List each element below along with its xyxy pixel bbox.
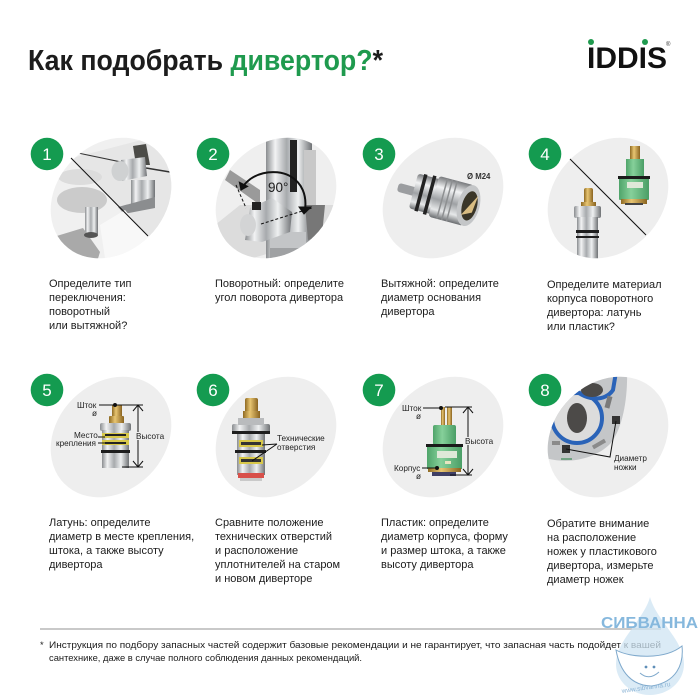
text: уплотнителей на старом [215,559,340,571]
text: Пластик: определите [381,517,489,529]
text: и размер штока, а также [381,545,506,557]
callout lines [252,444,277,461]
text: дивертора [381,306,435,318]
badge 5: 5 [42,381,52,400]
labels: Шток [77,401,97,410]
labels: крепления [56,439,96,448]
text: Определите материал [547,279,662,291]
labels: Место [74,431,98,440]
label: tech holes: отверстия [277,443,315,452]
image: switch types [50,138,172,258]
watermark: Sibvanna [601,597,698,695]
text: диаметр в месте крепления, [49,531,194,543]
footnote: * [40,639,44,650]
badge 8 [529,374,561,406]
text: Поворотный: определите [215,278,344,290]
label: M24: Ø M24 [467,172,491,181]
title: Как подобрать дивертор?* [28,45,384,77]
foot markers [561,416,620,459]
image: plastic disc with feet [548,376,627,461]
badge 1: 1 [42,145,52,164]
text: технических отверстий [215,531,332,543]
image: brass cartridge [100,405,131,468]
badge 3 [363,138,395,170]
text: Сравните положение [215,517,324,529]
panel: step 2 [197,130,345,304]
text: дивертора: латунь [547,307,642,319]
panel: step 3 [358,113,528,318]
badge 6: 6 [208,381,218,400]
badge 7: 7 [374,381,384,400]
callouts: stem, body, height [422,406,473,475]
text: на расположение [547,532,636,544]
background blob [26,352,196,522]
text: Вытяжной: определите [381,278,499,290]
callouts: stem, mount, height [98,404,143,467]
text: поворотный [49,306,110,318]
labels: Высота [465,437,494,446]
watermark: Sibvanna: www.sibvanna.ru [620,681,671,695]
panel: step 8 [528,374,668,586]
labels: Шток [402,404,422,413]
badge 1 [31,138,63,170]
panel: step 5 [26,352,196,571]
background blob [523,113,693,283]
rotation arc arrow [236,172,312,224]
badge 4 [529,138,561,170]
image: pull diverter [393,166,485,229]
badge 2: 2 [208,145,218,164]
background blob [358,352,528,522]
badge 3: 3 [374,145,384,164]
divider line [71,158,148,236]
text: Определите тип [49,278,132,290]
text: Обратите внимание [547,518,649,530]
label: foot diameter: ножки [614,463,637,472]
labels: Корпус [394,464,420,473]
label: tech holes: Технические [277,434,325,443]
text: высоту дивертора [381,559,474,571]
text: или вытяжной? [49,320,127,332]
callout lines [566,421,616,457]
image: brass cartridge with holes [232,398,270,481]
badge 7 [363,374,395,406]
labels: ø [416,472,421,481]
text: угол поворота дивертора [215,292,344,304]
labels: ø [92,409,97,418]
footnote: сантехнике, даже в случае полного соблюдения данных рекомендаций. [49,652,362,663]
background blob [191,352,361,522]
text: дивертора [49,559,103,571]
footnote rule [40,628,661,630]
panel: step 7 [358,352,528,571]
text: диаметр ножек [547,574,624,586]
label: foot diameter: Диаметр [614,454,647,463]
text: и новом диверторе [215,573,312,585]
labels [56,401,165,448]
image: brass cartridge [574,188,601,259]
image: plastic cartridge [426,407,463,476]
badge 8: 8 [540,381,550,400]
text: дивертора, измерьте [547,560,654,572]
panel: step 4 [528,138,668,330]
text: и расположение [215,545,298,557]
text: диаметр основания [381,292,481,304]
badge 4: 4 [540,145,550,164]
image: plastic cartridge [618,146,650,205]
divider line [570,159,646,235]
text: диаметр корпуса, форму [381,531,508,543]
background blob [358,113,528,283]
text: корпуса поворотного [547,293,653,305]
labels: ø [416,412,421,421]
badge 6 [197,374,229,406]
panel: step 6 [191,352,361,585]
logo: IDDIS: IDDIS [587,42,667,75]
text: Латунь: определите [49,517,151,529]
logo: IDDIS: ® [666,41,671,48]
badge 2 [197,138,229,170]
watermark: Sibvanna: СИБВАННА [601,615,698,632]
panel: step 1 [30,138,172,329]
footnote: Инструкция по подбору запасных частей содержит базовые рекомендации и не гарантирует, что запасная часть подойдет к вашей [49,639,661,650]
text: штока, а также высоту [49,545,164,557]
labels: Высота [136,432,165,441]
text: или пластик? [547,321,615,333]
background blob [523,352,693,522]
text: ножек у пластикового [547,546,657,558]
label: 90 degrees: 90° [268,180,288,195]
image: 90 degree rotation [216,138,336,258]
labels [394,404,494,481]
text: переключения: [49,292,126,304]
badge 5 [31,374,63,406]
